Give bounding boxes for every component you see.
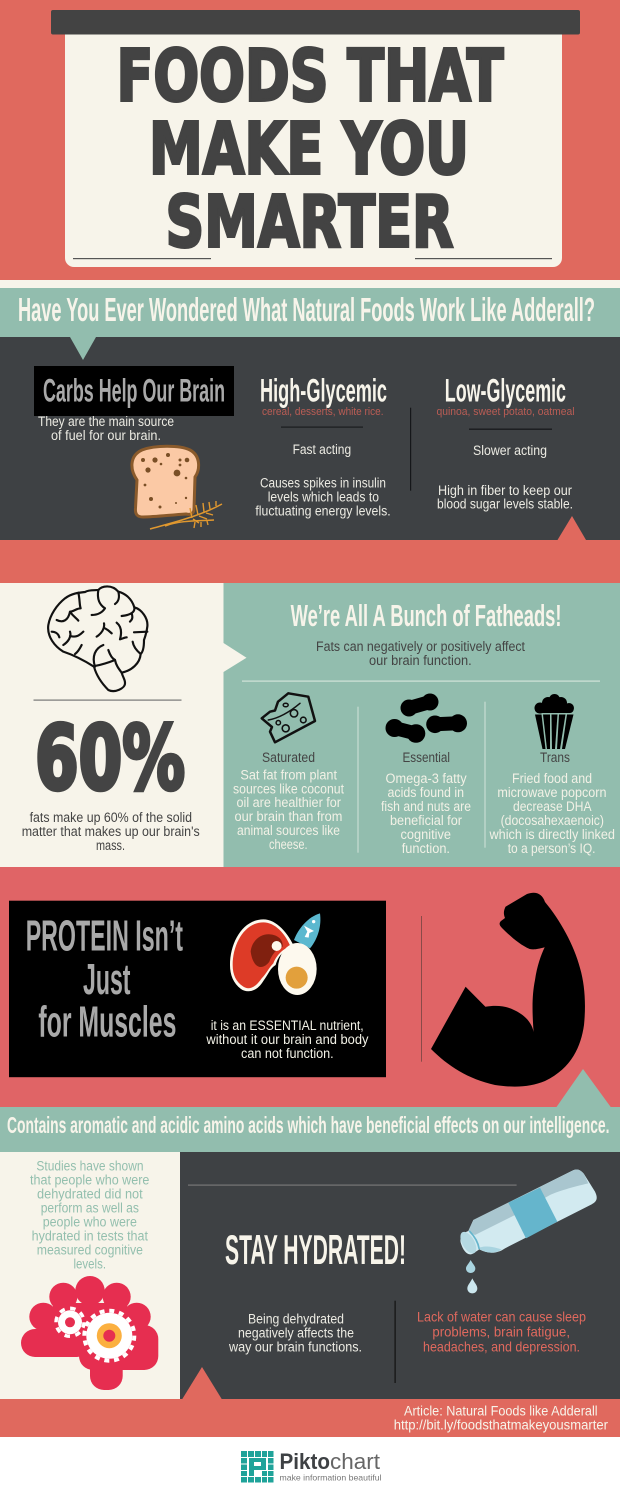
carbs heading box [34,366,234,416]
column: trans: to a person’s IQ. [508,841,596,856]
column: saturated: Sat fat from plant [240,767,337,782]
effects text [417,1309,586,1354]
column: trans: Trans [540,750,570,765]
carbs text: They are the main source [38,414,174,429]
study text: people who were [43,1215,137,1230]
protein heading: Just [83,955,131,1004]
effects text: Lack of water can cause sleep [417,1309,586,1325]
stat caption: mass. [96,838,125,853]
protein heading: PROTEIN Isn’t [26,912,183,961]
tagline: make information beautiful [280,1473,382,1483]
column: high glycemic: levels which leads to [268,490,379,505]
column: essential: Omega-3 fatty [386,771,467,786]
column: low glycemic: High in fiber to keep our [438,483,572,498]
dehydration text: way our brain functions. [228,1339,362,1354]
hydrated heading: STAY HYDRATED! [225,1226,406,1273]
column: low glycemic [436,372,574,512]
column: trans: microwave popcorn [497,785,606,800]
title [116,34,504,264]
column: trans: which is directly linked [489,827,615,842]
panel: dehydration study [0,1152,180,1400]
icon: red brain with gears [21,1276,158,1390]
icon: water bottle [457,1170,597,1293]
article credit: Article: Natural Foods like Adderall [404,1404,598,1419]
protein heading: for Muscles [38,998,176,1047]
icon: Piktochart mark [241,1451,274,1482]
column: trans [489,750,615,856]
stat caption: fats make up 60% of the solid [30,810,192,825]
column: saturated: Saturated [262,750,315,765]
column: essential: beneficial for [390,813,462,828]
dehydration text: Being dehydrated [248,1311,344,1326]
study text: dehydrated did not [37,1187,143,1202]
title: FOODS THAT [116,34,504,118]
panel: carbs [0,337,620,540]
pointer arrow [182,1367,222,1400]
pointer arrow [556,1069,611,1107]
carbs text [38,414,174,443]
icon: steak, fish and egg [230,913,320,995]
column: saturated: oil are healthier for [236,795,341,810]
article credit: http://bit.ly/foodsthatmakeyousmarter [394,1417,608,1432]
column: essential: cognitive [400,827,451,842]
column: low glycemic: Slower acting [473,443,547,458]
stat caption: matter that makes up our brain's [22,824,200,839]
dehydration text [228,1311,362,1354]
panel: amino acids banner [0,1069,620,1152]
stat caption [22,810,200,853]
icon: cheese [262,693,315,742]
title: MAKE YOU [149,108,469,190]
pointer arrow [558,516,586,540]
protein text: it is an ESSENTIAL nutrient, [211,1018,364,1033]
protein text: without it our brain and body [205,1032,369,1047]
column: essential: function. [402,841,450,856]
study text: levels. [74,1257,106,1272]
protein box [9,901,386,1077]
effects text: problems, brain fatigue, [432,1324,570,1340]
icon: brain outline [48,586,147,691]
column: saturated [233,750,344,852]
panel: fatheads [224,583,620,867]
icon: popcorn [534,694,574,749]
column: trans: decrease DHA [513,799,592,814]
column: essential: fish and nuts are [381,799,471,814]
column: high glycemic: Fast acting [293,442,351,457]
carbs heading box: Carbs Help Our Brain [43,372,225,408]
study text: that people who were [30,1173,149,1188]
column: essential: Essential [402,750,450,765]
panel: red divider band [0,516,620,583]
fatheads intro: Fats can negatively or positively affect [316,639,525,654]
fatheads intro: our brain function. [369,653,472,668]
panel: source footer [0,1367,620,1437]
column: high glycemic: Causes spikes in insulin [260,476,386,491]
study text [30,1159,149,1272]
study text: hydrated in tests that [32,1229,148,1244]
panel: stay hydrated [180,1152,620,1400]
column: high glycemic: High-Glycemic [260,372,387,408]
column: trans: (docosahexaenoic) [501,813,604,828]
panel: sixty percent [0,583,224,867]
fatheads intro [316,639,525,668]
column: saturated: our brain than from [234,809,342,824]
column: high glycemic: cereal, desserts, white rice. [262,406,384,418]
panel: protein [0,867,620,1107]
pointer arrow [224,643,246,672]
icon: nuts [386,694,467,743]
wordmark: Pikto [280,1449,330,1474]
study text: measured cognitive [37,1243,143,1258]
column: saturated: cheese. [269,837,308,852]
title: SMARTER [166,180,454,264]
column: trans: Fried food and [512,771,592,786]
column: low glycemic: blood sugar levels stable. [437,497,573,512]
protein heading [26,912,183,1047]
protein text: can not function. [241,1046,334,1061]
banner pointer arrow [70,337,96,360]
wordmark light: chart [330,1449,380,1474]
article credit [394,1404,608,1432]
logo: Piktochart [0,1437,620,1494]
column: essential [381,750,471,856]
protein text [205,1018,369,1061]
icon: flexed arm [431,893,585,1087]
dehydration text: negatively affects the [238,1325,354,1340]
study text: Studies have shown [36,1159,144,1174]
icon: bread with wheat [132,446,222,529]
effects text: headaches, and depression. [423,1338,580,1354]
column: essential: acids found in [388,785,464,800]
panel: question banner [0,280,620,338]
column: saturated: sources like coconut [233,781,344,796]
title card [65,20,562,267]
panel: title header [0,0,620,280]
study text: perform as well as [41,1201,139,1216]
column: low glycemic: quinoa, sweet potato, oatmeal [436,406,574,418]
title card top bar [51,10,580,34]
stat: 60%: 60% [35,707,185,810]
column: saturated: animal sources like [237,823,340,838]
column: high glycemic: fluctuating energy levels. [255,504,391,519]
carbs text: of fuel for our brain. [51,428,161,443]
column: high glycemic [255,372,391,519]
